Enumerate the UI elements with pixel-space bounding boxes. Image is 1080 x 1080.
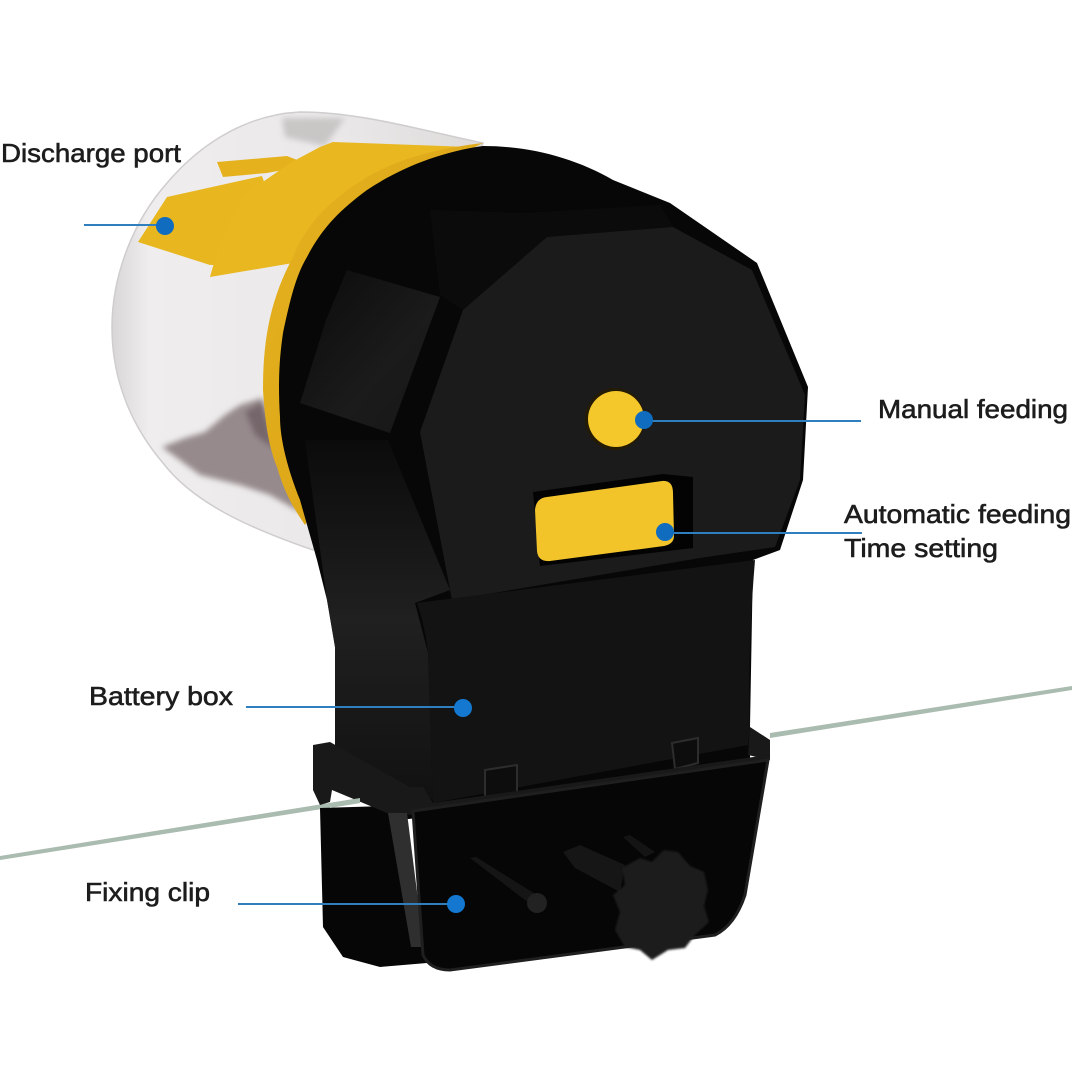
label: Battery box: Battery box	[89, 681, 233, 711]
time setting slot	[533, 474, 693, 566]
grey clip strip	[388, 813, 424, 947]
black main body	[279, 146, 808, 820]
transparent food container	[112, 112, 483, 550]
clip top bar	[313, 742, 770, 815]
clip screw and bolts	[470, 835, 655, 913]
label: Fixing clip	[85, 877, 465, 913]
yellow ring	[263, 143, 483, 525]
back clip jaw	[320, 806, 427, 967]
manual feeding button	[585, 388, 645, 450]
glass passing through clip	[330, 798, 360, 808]
label: Automatic feeding Time setting: Time setting	[844, 533, 998, 563]
knob	[613, 850, 709, 960]
cover latches	[485, 738, 698, 798]
front tray	[413, 760, 768, 970]
product: fish feeder	[112, 112, 808, 970]
yellow discharge port	[138, 142, 470, 277]
label: Manual feeding	[635, 394, 1068, 429]
label: Fixing clip: Fixing clip	[85, 877, 210, 907]
side lower shading	[305, 440, 450, 800]
side recess panel	[300, 270, 440, 433]
automatic feeding slider	[535, 481, 674, 561]
label: Discharge port	[1, 138, 182, 235]
octagonal front face	[420, 227, 805, 600]
label: Automatic feeding Time setting	[656, 499, 1071, 563]
aquarium glass edge line	[0, 686, 1072, 860]
label: Manual feeding: Manual feeding	[878, 394, 1068, 424]
food pellets	[162, 118, 345, 512]
label: Battery box	[89, 681, 472, 717]
top facet	[430, 205, 673, 310]
label: Discharge port: Discharge port	[1, 138, 182, 168]
battery box cover	[417, 560, 755, 803]
label: Automatic feeding Time setting: Automatic feeding	[844, 499, 1071, 529]
